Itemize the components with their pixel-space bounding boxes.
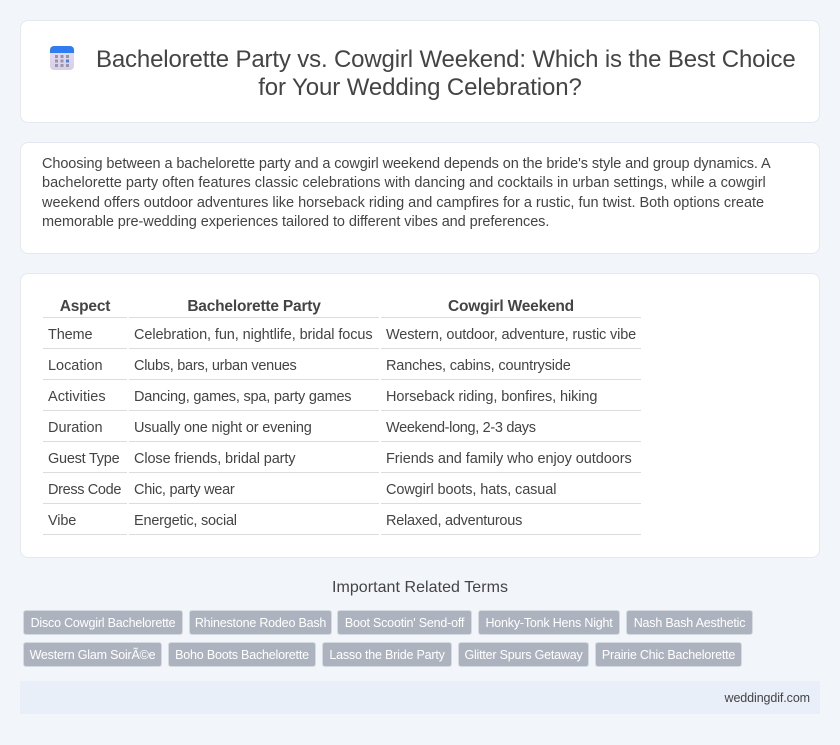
related term tags [23, 610, 753, 667]
tag [23, 610, 183, 635]
row: guest type [48, 451, 632, 467]
panel: comparison table [20, 273, 820, 558]
heading: important related terms: Important Related Terms [332, 579, 508, 596]
table header: bachelorette party: Bachelorette Party [187, 298, 321, 315]
row: location [48, 358, 571, 374]
text block: introduction: Choosing between a bachelorette party and a cowgirl weekend depends on the bride's style and group dynamics. A [42, 156, 771, 172]
row: duration: Weekend-long, 2-3 days [386, 420, 536, 436]
tag [626, 610, 753, 635]
title [96, 46, 796, 101]
tag: Disco Cowgirl Bachelorette [31, 616, 175, 630]
row: location: Clubs, bars, urban venues [134, 358, 297, 374]
row: theme [48, 327, 636, 343]
row: vibe: Relaxed, adventurous [386, 513, 522, 529]
tag: Boho Boots Bachelorette [175, 648, 309, 662]
tag [189, 610, 332, 635]
row: dress code: Cowgirl boots, hats, casual [386, 482, 556, 498]
footer: source: weddingdif.com [725, 691, 810, 705]
table header: cowgirl weekend: Cowgirl Weekend [448, 298, 574, 315]
panel: header [20, 20, 820, 123]
tag: Nash Bash Aesthetic [634, 616, 745, 630]
row: activities: Activities [48, 389, 106, 405]
row: theme: Theme [48, 327, 92, 343]
tag [458, 642, 589, 667]
row: guest type: Friends and family who enjoy outdoors [386, 451, 632, 467]
row: dress code: Dress Code [48, 482, 121, 498]
row: vibe: Vibe [48, 513, 76, 529]
row: activities [48, 389, 597, 405]
tag: Lasso the Bride Party [329, 648, 445, 662]
text block: introduction: weekend offers outdoor adventures like horseback riding and campfires for a rustic, fun twist. Both options create [42, 195, 764, 211]
row: duration [48, 420, 536, 436]
tag: Glitter Spurs Getaway [464, 648, 583, 662]
title: for Your Wedding Celebration? [258, 74, 582, 101]
row: dress code [48, 482, 556, 498]
text block: introduction [42, 156, 771, 230]
row: vibe [48, 513, 522, 529]
row: location: Ranches, cabins, countryside [386, 358, 571, 374]
tag [595, 642, 742, 667]
tag [337, 610, 472, 635]
row: guest type: Close friends, bridal party [134, 451, 295, 467]
row: theme: Celebration, fun, nightlife, bridal focus [134, 327, 373, 343]
row: theme: Western, outdoor, adventure, rustic vibe [386, 327, 636, 343]
tag: Western Glam SoirÃ©e [30, 648, 155, 662]
tag [168, 642, 316, 667]
row: location: Location [48, 358, 103, 374]
footer bar [20, 681, 820, 714]
text block: introduction: bachelorette party often features classic celebrations with dancing and cocktails in urban settings, while a cowgirl [42, 175, 766, 191]
panel: introduction [20, 142, 820, 254]
tag: Boot Scootin' Send-off [345, 616, 464, 630]
tag: Rhinestone Rodeo Bash [195, 616, 326, 630]
tag [23, 642, 162, 667]
row: activities: Horseback riding, bonfires, hiking [386, 389, 597, 405]
tag [322, 642, 452, 667]
tag [478, 610, 620, 635]
title: Bachelorette Party vs. Cowgirl Weekend: Which is the Best Choice [96, 46, 796, 73]
icon: calendar [50, 46, 74, 70]
row: guest type: Guest Type [48, 451, 119, 467]
text block: introduction: memorable pre-wedding experiences tailored to different vibes and preferences. [42, 214, 549, 230]
tag: Prairie Chic Bachelorette [602, 648, 735, 662]
row: duration: Usually one night or evening [134, 420, 312, 436]
tag: Honky-Tonk Hens Night [485, 616, 613, 630]
table header: aspect: Aspect [60, 298, 110, 315]
row: dress code: Chic, party wear [134, 482, 234, 498]
row: activities: Dancing, games, spa, party games [134, 389, 351, 405]
row: duration: Duration [48, 420, 103, 436]
row: vibe: Energetic, social [134, 513, 237, 529]
